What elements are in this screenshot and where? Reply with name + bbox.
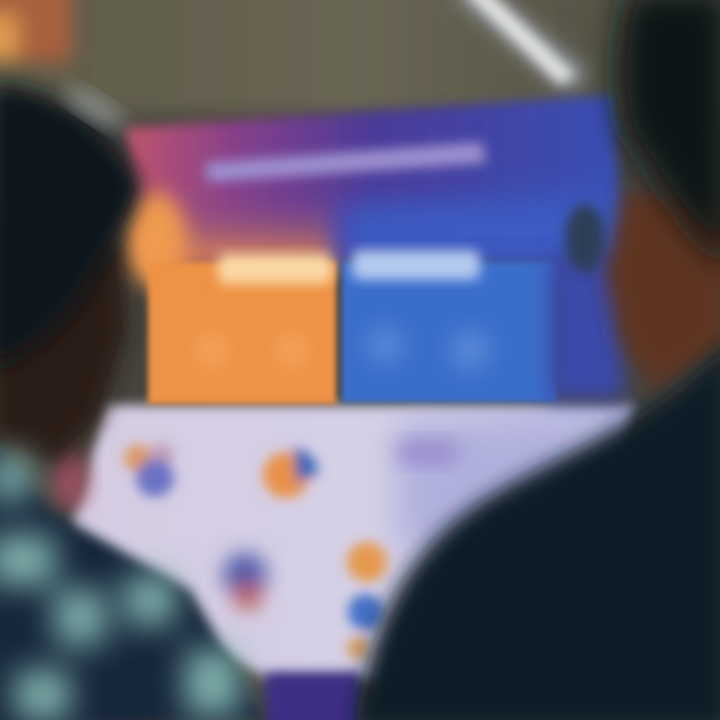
glasses [565, 204, 605, 272]
panel: top banner [123, 95, 625, 288]
chart: lower pie [223, 553, 267, 610]
panel: blue column [342, 255, 624, 402]
person: left, head and shirt [0, 82, 265, 720]
person: right, head and shoulder [355, 0, 720, 720]
panel: lower white section with charts [52, 405, 635, 720]
chart: left pie [124, 443, 174, 497]
hair [0, 85, 140, 370]
ceiling light streak [450, 0, 590, 92]
checked shirt [0, 440, 265, 720]
chart: orange and blue stacked marks [347, 542, 387, 659]
icons in blue panel [367, 327, 490, 370]
blurred title bar [205, 142, 486, 182]
poster [52, 95, 635, 720]
chart: centre pie [263, 448, 318, 498]
hair [617, 0, 720, 265]
blurred blue heading [352, 250, 480, 280]
icons in orange panel [194, 332, 310, 368]
face [605, 190, 720, 390]
chart: small heading mark [398, 440, 458, 464]
cap highlight [61, 82, 129, 134]
shoulder [355, 340, 720, 720]
blurred orange heading [218, 254, 332, 284]
panel: orange column [148, 262, 336, 404]
face shadow [0, 220, 128, 465]
ceiling orange light, top left [0, 0, 72, 62]
